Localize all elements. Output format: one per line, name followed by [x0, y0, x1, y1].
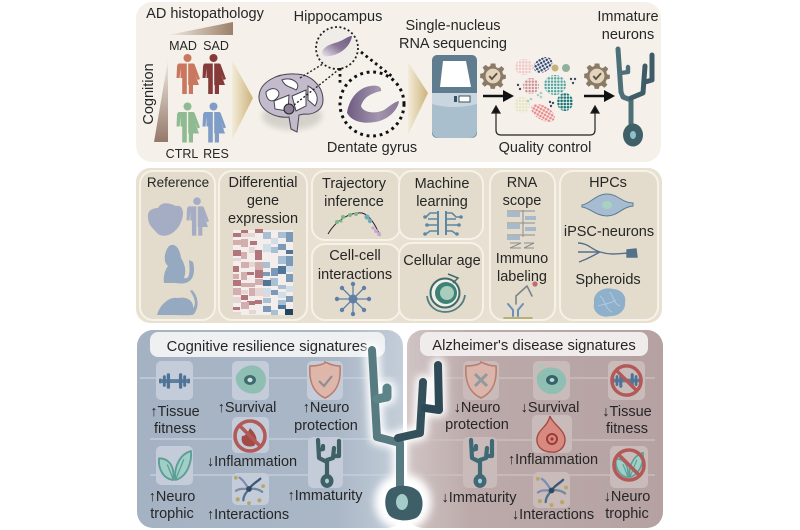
- icon: healthy cell: [236, 365, 266, 394]
- panel: cognitive resilience signatures: [137, 330, 403, 528]
- central neuron: [372, 350, 439, 523]
- label: tissue fitness down: ↓Tissue: [602, 404, 652, 420]
- heading: single-nucleus RNA sequencing: RNA sequencing: [399, 36, 507, 52]
- heading: immuno labeling: Immuno: [496, 251, 548, 267]
- icon: immature neuron small: [318, 440, 339, 488]
- heading: RNA scope: scope: [503, 193, 541, 209]
- icon: immuno labeling antibody: [504, 281, 538, 318]
- arrow: sequencer to clusters: [483, 90, 514, 102]
- icon: brain: [259, 74, 323, 132]
- heading: differential gene expression: Differential: [228, 175, 298, 191]
- label: interactions up: ↑Interactions: [207, 507, 289, 523]
- label: MAD: MAD: [169, 39, 197, 53]
- label: immaturity up: ↑Immaturity: [288, 488, 363, 504]
- heading: HPCs: HPCs: [589, 175, 627, 191]
- heading: cognitive resilience: [150, 332, 385, 357]
- heading: AD histopathology: AD histopathology: [146, 6, 265, 22]
- icon: quality gear 2: [584, 63, 610, 89]
- label: survival up: ↑Survival: [218, 400, 276, 416]
- icon: shield check: [310, 362, 340, 398]
- heading: single-nucleus RNA sequencing: Single-nucleus: [405, 18, 501, 34]
- label: tissue fitness down: fitness: [606, 421, 648, 437]
- icon: MAD person: [176, 54, 200, 94]
- heading: cellular age: Cellular age: [403, 253, 481, 269]
- label: inflammation up: ↑Inflammation: [508, 452, 598, 468]
- icon: SAD person: [202, 54, 226, 94]
- icon: mouse: [157, 290, 198, 315]
- icon: RES person: [202, 102, 226, 142]
- icon: flame: [537, 416, 565, 452]
- icon: spheroid: [594, 288, 625, 317]
- icon: inflammation crossed: [235, 421, 265, 451]
- gradient wedge: histopathology: [168, 22, 233, 35]
- label: cognition: Cognition: [141, 63, 157, 125]
- chart: gene expression heatmap: [233, 229, 293, 315]
- arrow: clusters to neuron: [584, 90, 615, 102]
- dotted zoom lines: brain to hippocampus: [294, 62, 342, 105]
- label: neuro protection down: ↓Neuro: [454, 400, 500, 416]
- gradient wedge: cognition: [154, 60, 168, 142]
- panel: Alzheimer's disease signatures: [407, 330, 663, 528]
- label: neurotrophic down: trophic: [605, 506, 649, 522]
- heading: RNA scope: RNA: [507, 175, 537, 191]
- label: neuro protection up: protection: [294, 418, 358, 434]
- heading: iPSC-neurons: iPSC-neurons: [564, 224, 654, 240]
- heading: cell-cell interactions: interactions: [318, 267, 392, 283]
- label: inflammation down: ↓Inflammation: [207, 454, 297, 470]
- icon: interactions reduced: [536, 477, 568, 507]
- label: neuro protection up: ↑Neuro: [303, 400, 349, 416]
- label: tissue fitness up: ↑Tissue: [150, 404, 200, 420]
- panel: analysis methods: [136, 168, 662, 323]
- label: immaturity down: ↓Immaturity: [442, 490, 517, 506]
- icon: interactions: [234, 476, 265, 505]
- icon: immature neuron: [618, 49, 652, 146]
- label: CTRL: CTRL: [166, 147, 198, 161]
- label: dentate gyrus: Dentate gyrus: [327, 140, 417, 156]
- heading: differential gene expression: expression: [228, 211, 298, 227]
- icon: trajectory arc: [328, 212, 381, 236]
- heading: Alzheimer's disease: Alzheimer's disease signatures: [432, 338, 636, 354]
- heading: machine learning: Machine: [415, 176, 469, 192]
- label: neurotrophic up: ↑Neuro: [149, 489, 195, 505]
- heading: cognitive resilience: Cognitive resilience signatures: [167, 339, 367, 355]
- icon: cellular age cell: [427, 274, 465, 312]
- icon: shield cross: [466, 362, 496, 398]
- arrow: to sequencer: [408, 62, 428, 135]
- heading: trajectory inference: inference: [324, 194, 384, 210]
- label: tissue fitness up: fitness: [154, 421, 196, 437]
- dotted zoom lines: hippocampus to dentate: [340, 52, 394, 84]
- heading: differential gene expression: gene: [247, 193, 279, 209]
- heading: reference: Reference: [147, 175, 209, 190]
- icon: dumbbell: [159, 373, 190, 389]
- heading: Hippocampus: Hippocampus: [294, 9, 382, 25]
- label: SAD: SAD: [203, 39, 229, 53]
- icon: monkey: [164, 245, 194, 283]
- icon: neurotrophic crossed: [614, 450, 644, 480]
- icon: sequencer: [432, 55, 477, 138]
- heading: cell-cell interactions: Cell-cell: [329, 248, 381, 264]
- label: quality control: Quality control: [499, 140, 591, 156]
- chart: single-nucleus clusters: [514, 54, 576, 126]
- panel: workflow overview: [136, 2, 661, 162]
- icon: human: [186, 197, 209, 236]
- icon: CTRL person: [176, 102, 200, 142]
- heading: machine learning: learning: [416, 194, 468, 210]
- icon: tissue fitness crossed: [612, 366, 641, 395]
- heading: immuno labeling: labeling: [497, 269, 547, 285]
- label: neuro protection down: protection: [445, 417, 509, 433]
- icon: damaged cell: [535, 364, 566, 394]
- label: neurotrophic down: ↓Neuro: [604, 489, 650, 505]
- label: RES: RES: [203, 147, 229, 161]
- arrow: to brain: [232, 60, 253, 140]
- heading: immature neurons: neurons: [602, 27, 654, 43]
- icon: dentate gyrus lens: [340, 72, 404, 136]
- icon: machine learning chip: [423, 211, 463, 236]
- icon: iPSC neuron: [578, 243, 637, 262]
- icon: RNA scope probes: [507, 210, 536, 248]
- icon: HPC cell: [582, 194, 633, 216]
- label: neurotrophic up: trophic: [150, 506, 194, 522]
- heading: immature neurons: Immature: [597, 9, 659, 25]
- heading: spheroids: Spheroids: [575, 272, 641, 288]
- icon: quality gear 1: [480, 63, 506, 89]
- icon: leaf: [159, 451, 191, 480]
- icon: immature neuron small damaged: [471, 440, 492, 488]
- label: survival down: ↓Survival: [521, 400, 579, 416]
- icon: fetus: [148, 203, 183, 236]
- arrow: quality control loop: [492, 106, 599, 135]
- label: interactions down: ↓Interactions: [512, 507, 594, 523]
- heading: Alzheimer's disease: [420, 332, 648, 356]
- heading: trajectory inference: Trajectory: [322, 176, 386, 192]
- icon: cell network: [335, 282, 371, 316]
- icon: hippocampus lens: [316, 27, 358, 69]
